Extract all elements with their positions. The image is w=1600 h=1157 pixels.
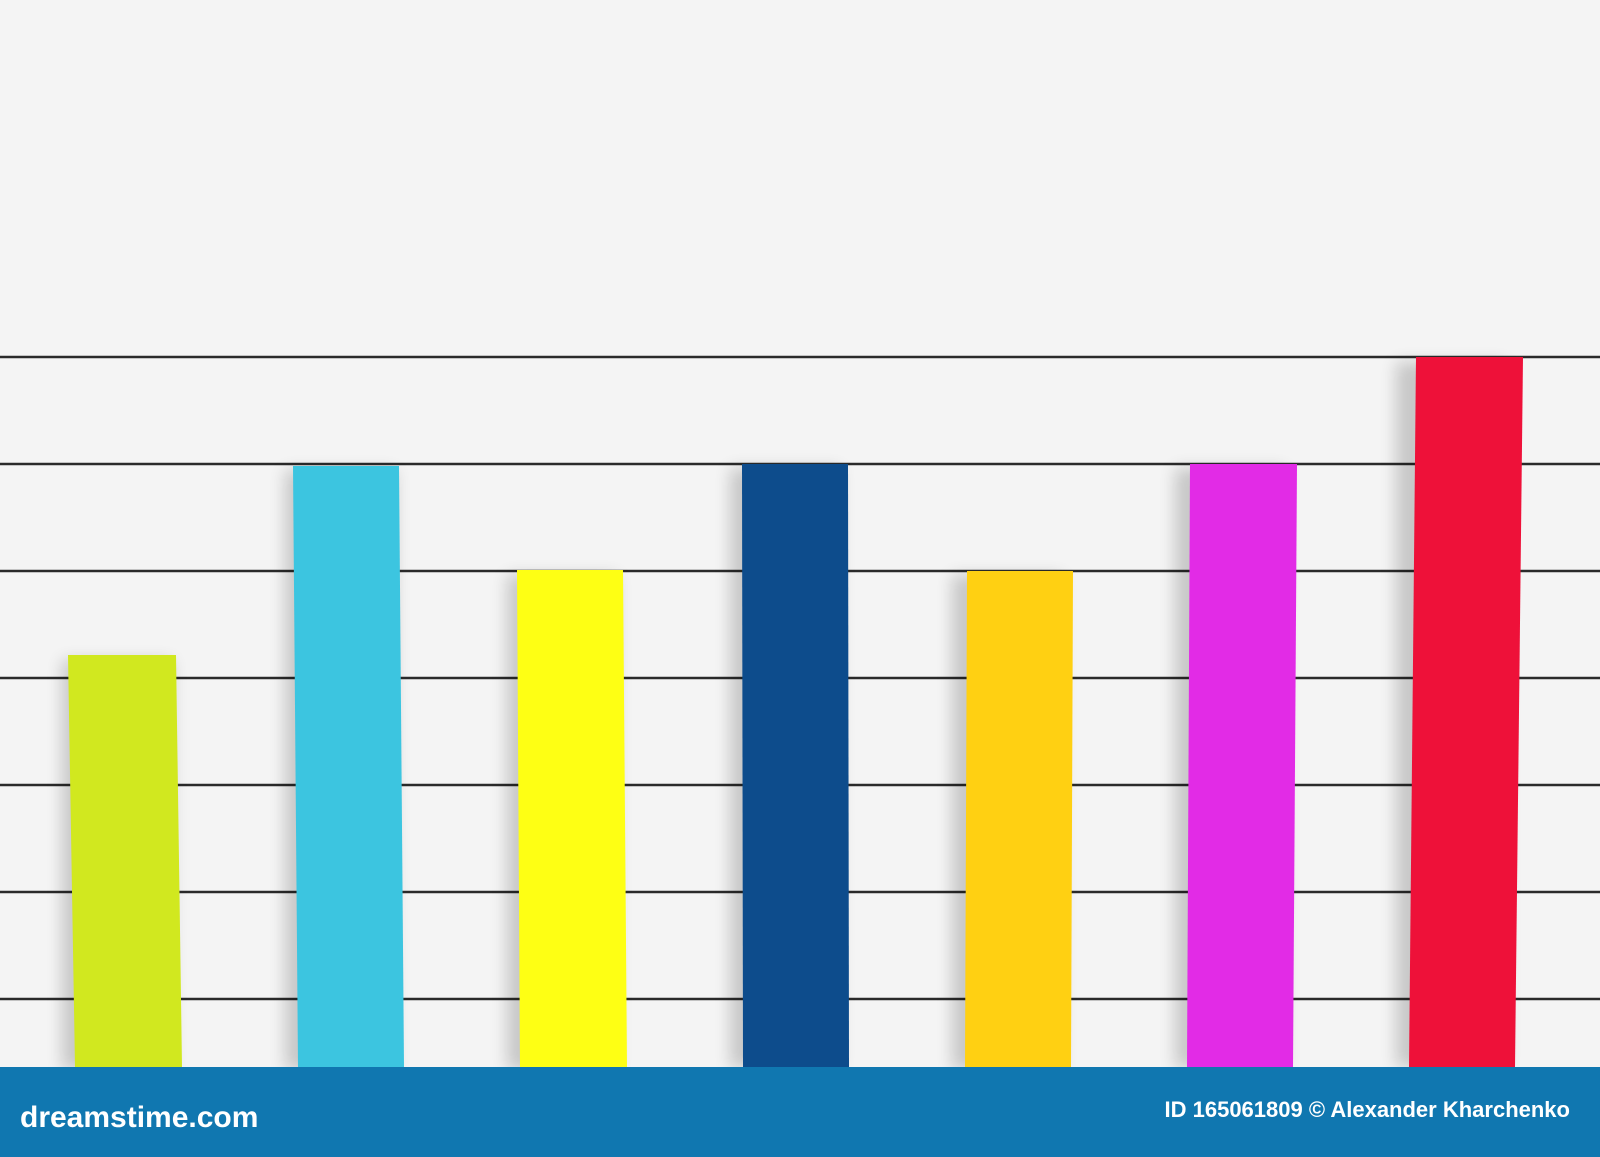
bar 3: yellow xyxy=(517,570,627,1067)
bar 6: magenta xyxy=(1187,464,1297,1067)
footer band xyxy=(0,1067,1600,1157)
footer logo text: dreamstime.com xyxy=(20,1101,258,1134)
bar 1: lime xyxy=(68,655,182,1067)
bar 4: navy xyxy=(742,464,849,1067)
bar 2: cyan xyxy=(293,466,404,1067)
bar 7: red xyxy=(1409,357,1523,1067)
bar 5: orange xyxy=(965,571,1073,1067)
footer credit text: ID 165061809 © Alexander Kharchenko xyxy=(1164,1097,1570,1122)
